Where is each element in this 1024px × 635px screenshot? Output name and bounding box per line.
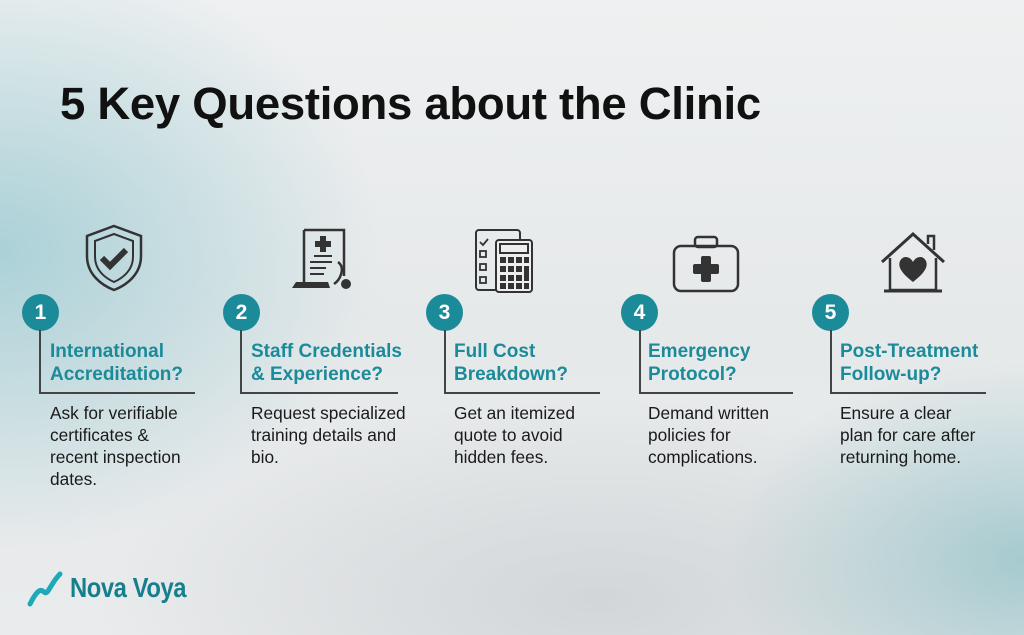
number badge 4 xyxy=(621,294,658,331)
icon: shield check xyxy=(86,224,142,292)
number badge 4: 4 xyxy=(634,301,645,324)
heading 3: Full Cost xyxy=(454,341,535,362)
body 2: bio. xyxy=(251,447,279,467)
body 5: Ensure a clear xyxy=(840,403,951,423)
number badge 1: 1 xyxy=(35,301,46,324)
heading 5: Follow-up? xyxy=(840,364,941,385)
body 5 xyxy=(840,403,976,467)
panel: step 4 xyxy=(621,236,793,467)
body 2: training details and xyxy=(251,425,396,445)
body 4: complications. xyxy=(648,447,758,467)
panel: step 2 xyxy=(223,228,406,467)
body 1 xyxy=(50,403,181,489)
icon: logo mark xyxy=(28,572,62,606)
icon: checklist calculator xyxy=(475,229,533,293)
title: 5 Key Questions about the Clinic xyxy=(60,78,761,129)
heading 2: Staff Credentials xyxy=(251,341,402,362)
heading 5: Post-Treatment xyxy=(840,341,978,362)
heading 3 xyxy=(454,341,568,385)
icon: medical document xyxy=(292,228,351,289)
number badge 1 xyxy=(22,294,59,331)
icon: house heart xyxy=(881,232,945,292)
number badge 5: 5 xyxy=(825,301,836,324)
panel: step 5 xyxy=(812,232,986,467)
body 4 xyxy=(648,403,769,467)
number badge 3: 3 xyxy=(439,301,450,324)
heading 1: International xyxy=(50,341,164,362)
body 2: Request specialized xyxy=(251,403,406,423)
heading 5 xyxy=(840,341,978,385)
body 1: dates. xyxy=(50,469,97,489)
body 1: certificates & xyxy=(50,425,149,445)
body 1: Ask for verifiable xyxy=(50,403,178,423)
body 3: Get an itemized xyxy=(454,403,575,423)
body 3: quote to avoid xyxy=(454,425,563,445)
body 5: plan for care after xyxy=(840,425,975,445)
heading 2: & Experience? xyxy=(251,364,383,385)
body 5: returning home. xyxy=(840,447,961,467)
body 3 xyxy=(454,403,575,467)
heading 2 xyxy=(251,341,402,385)
logo: Nova Voya xyxy=(28,572,187,606)
body 3: hidden fees. xyxy=(454,447,548,467)
heading 1 xyxy=(50,341,183,385)
heading 4: Emergency xyxy=(648,341,750,362)
number badge 2: 2 xyxy=(236,301,247,324)
heading 3: Breakdown? xyxy=(454,364,568,385)
body 2 xyxy=(251,403,406,467)
number badge 2 xyxy=(223,294,260,331)
body 4: policies for xyxy=(648,425,731,445)
number badge 3 xyxy=(426,294,463,331)
heading 1: Accreditation? xyxy=(50,364,183,385)
body 4: Demand written xyxy=(648,403,769,423)
heading 4: Protocol? xyxy=(648,364,737,385)
panel: step 1 xyxy=(22,224,195,489)
body 1: recent inspection xyxy=(50,447,181,467)
icon: first aid kit xyxy=(672,236,740,292)
panel: step 3 xyxy=(426,229,600,467)
logo: Nova Voya: Nova Voya xyxy=(70,572,186,603)
heading 4 xyxy=(648,341,750,385)
number badge 5 xyxy=(812,294,849,331)
